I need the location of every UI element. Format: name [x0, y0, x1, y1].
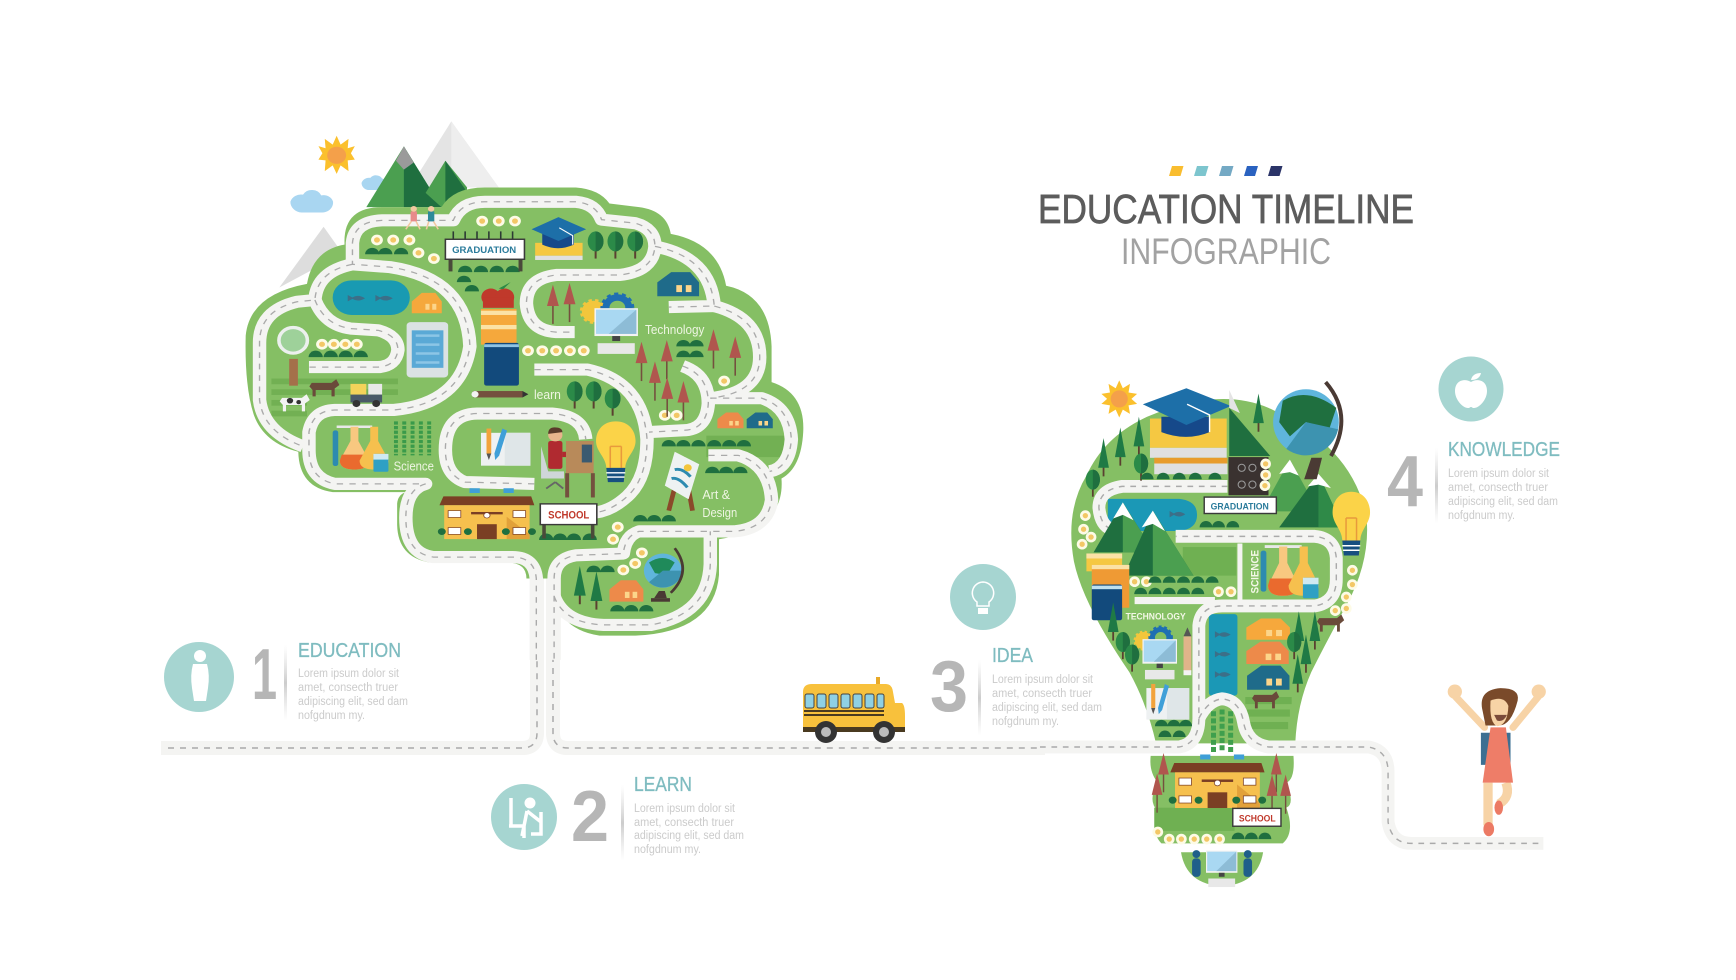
school sign — [540, 504, 597, 539]
body text 2: amet, consecth truer — [634, 817, 734, 829]
body text 4 — [1448, 468, 1558, 522]
graduation sign: GRADUATION — [452, 245, 516, 256]
heading: education: EDUCATION — [298, 640, 401, 662]
school sign: SCHOOL — [548, 510, 589, 521]
animals and truck — [280, 379, 382, 411]
pencil — [471, 391, 528, 397]
bushes lower — [1155, 720, 1192, 737]
red trees — [547, 283, 741, 420]
pine trees right — [1287, 611, 1320, 692]
pine trees — [574, 566, 602, 610]
body text 2: Lorem ipsum dolor sit — [634, 803, 736, 815]
body text 4: nofgdnum my. — [1448, 510, 1515, 522]
computer — [594, 308, 638, 354]
heading: idea: IDEA — [992, 645, 1034, 667]
body text 3: nofgdnum my. — [992, 716, 1059, 728]
step 1: education — [164, 635, 408, 722]
school sign — [1233, 808, 1281, 826]
divider 4 — [1435, 448, 1438, 524]
icon: student at desk — [491, 784, 557, 850]
open book — [481, 429, 530, 466]
body text 4: Lorem ipsum dolor sit — [1448, 468, 1550, 480]
graduation sign: GRADUATION — [1211, 502, 1269, 512]
science label: Science — [394, 459, 434, 474]
globe — [1273, 382, 1341, 479]
bush row top — [1141, 473, 1221, 479]
hands — [1448, 685, 1546, 699]
body text 3: amet, consecth truer — [992, 688, 1092, 700]
number 2: 2 — [571, 777, 609, 857]
pencil — [1184, 627, 1191, 675]
step 4: knowledge — [1387, 356, 1560, 524]
tablet — [407, 322, 448, 377]
body text 1 — [298, 668, 408, 722]
step 2: learn — [491, 774, 744, 861]
field stripes — [1154, 547, 1292, 831]
body text 1: amet, consecth truer — [298, 682, 398, 694]
icon: person — [164, 642, 234, 712]
red trees — [1152, 753, 1291, 814]
bike board — [1228, 457, 1268, 495]
legs — [1488, 783, 1507, 826]
graduation sign — [1204, 497, 1276, 514]
body text 3 — [992, 674, 1102, 728]
bushes — [309, 248, 751, 611]
runners — [406, 206, 438, 229]
gears and computer — [1108, 602, 1177, 679]
brain roads — [260, 202, 791, 660]
number 4: 4 — [1387, 442, 1423, 522]
pond — [333, 280, 410, 315]
bushes base — [1232, 833, 1271, 839]
learn label: learn — [534, 388, 561, 402]
bushes mid — [1134, 521, 1239, 594]
sun — [1101, 380, 1137, 417]
head — [1482, 688, 1518, 726]
title: EDUCATION TIMELINE — [1038, 186, 1414, 232]
body text 4: amet, consecth truer — [1448, 482, 1548, 494]
icon: light bulb — [950, 564, 1016, 630]
school building — [1169, 754, 1266, 808]
flowers — [1077, 459, 1358, 844]
bulb body — [1071, 399, 1367, 743]
easel — [665, 452, 699, 511]
divider 1 — [284, 645, 287, 721]
graduation sign — [445, 231, 524, 271]
dress — [1483, 727, 1513, 783]
backpack — [1481, 733, 1511, 765]
body text 4: adipiscing elit, sed dam — [1448, 496, 1558, 508]
body text 1: Lorem ipsum dolor sit — [298, 668, 400, 680]
body text 2: adipiscing elit, sed dam — [634, 830, 744, 842]
technology label: Technology — [645, 323, 705, 337]
science flasks — [1261, 547, 1319, 598]
cows — [1252, 615, 1344, 708]
shoes — [1483, 801, 1503, 836]
body text 1: nofgdnum my. — [298, 710, 365, 722]
number 1: 1 — [252, 635, 277, 715]
sun — [318, 136, 355, 174]
mountains — [279, 121, 499, 287]
heading: knowledge: KNOWLEDGE — [1448, 439, 1560, 461]
bulb roads — [1040, 486, 1543, 843]
fish — [1170, 511, 1231, 678]
icon: apple — [1438, 356, 1504, 422]
people and computer — [1192, 850, 1252, 887]
person at desk — [541, 427, 595, 497]
light bulb map — [1040, 380, 1543, 887]
timeline road — [161, 540, 1045, 748]
flowers — [316, 216, 730, 575]
open book — [1146, 684, 1189, 720]
number 3: 3 — [930, 647, 968, 727]
books and graduation cap — [1143, 388, 1231, 474]
step 3: idea — [930, 564, 1102, 736]
art and design label — [702, 488, 737, 520]
globe — [644, 548, 683, 602]
magnifier — [279, 327, 307, 386]
art and design label: Design — [702, 506, 737, 520]
clouds — [290, 175, 388, 213]
light bulb — [596, 421, 636, 482]
field stripes — [271, 379, 785, 457]
mountains right — [1229, 390, 1343, 527]
brain body — [246, 187, 803, 636]
mountains left and books — [1086, 502, 1194, 620]
school bus — [803, 677, 905, 743]
school building — [438, 488, 536, 539]
arms — [1456, 697, 1538, 727]
brain map — [246, 121, 803, 660]
bulb tip — [1181, 852, 1263, 886]
body text 1: adipiscing elit, sed dam — [298, 696, 408, 708]
pine forest — [1086, 394, 1264, 497]
art and design label: Art & — [702, 488, 730, 502]
crops — [396, 421, 429, 455]
river — [1209, 614, 1237, 696]
houses — [1246, 618, 1290, 690]
corn crop — [1214, 709, 1231, 752]
divider 3 — [978, 660, 981, 736]
pond — [1108, 499, 1197, 531]
bulb base — [1150, 756, 1294, 843]
light bulb — [1333, 492, 1370, 555]
school sign: SCHOOL — [1239, 814, 1276, 825]
book stack and apple — [481, 282, 519, 386]
body text 3: Lorem ipsum dolor sit — [992, 674, 1094, 686]
heading: learn: LEARN — [634, 774, 692, 796]
technology label: TECHNOLOGY — [1126, 612, 1186, 623]
body text 2 — [634, 803, 744, 856]
gears — [582, 294, 632, 322]
round trees — [567, 231, 643, 416]
body text 3: adipiscing elit, sed dam — [992, 702, 1102, 714]
divider 2 — [621, 785, 624, 861]
science flasks — [333, 427, 389, 472]
girl jumping — [1448, 685, 1546, 836]
graduation cap — [532, 217, 586, 260]
title accent squares — [1169, 166, 1282, 176]
body text 2: nofgdnum my. — [634, 844, 701, 856]
subtitle: INFOGRAPHIC — [1121, 231, 1331, 272]
houses — [412, 272, 773, 602]
science label: SCIENCE — [1249, 550, 1261, 593]
